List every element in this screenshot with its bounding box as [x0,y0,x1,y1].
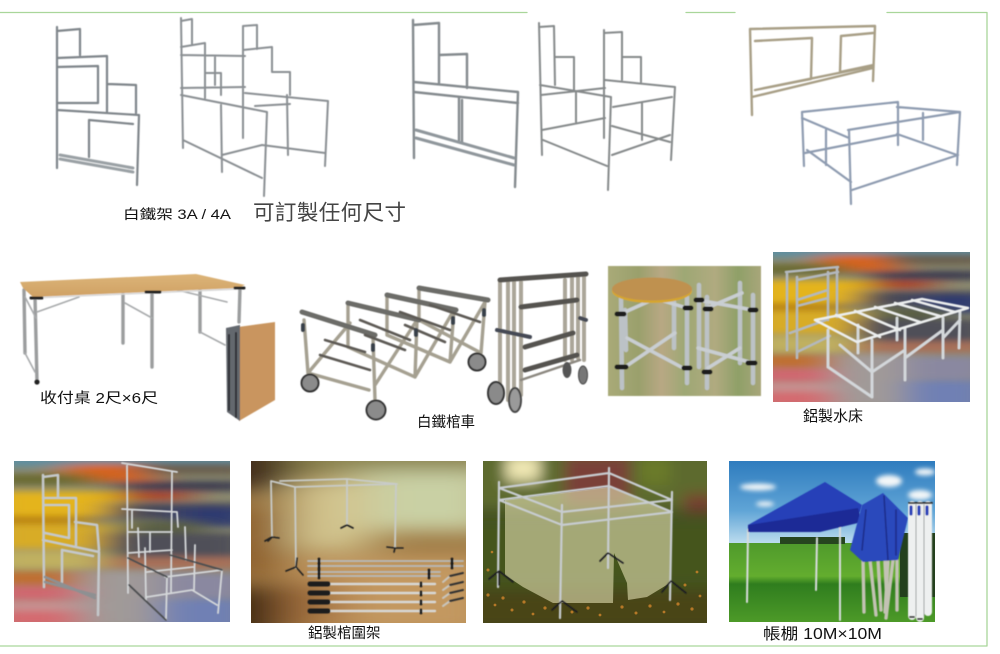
caption: tent size: 帳棚 10M×10M [763,625,882,643]
product: white iron rack small frame [57,27,139,185]
aluminium water bed frame [786,267,968,397]
panel: racks on rainbow background [0,455,264,629]
fallen leaves [486,551,701,616]
caption: white iron coffin cart: 白鐵棺車 [417,414,475,431]
product: beige rack frame [750,26,875,115]
product: folding table [20,274,275,421]
panel: blue canopy tent on lawn [729,461,935,622]
disassembled poles and fittings [308,559,463,613]
assembled blue tent [747,482,862,620]
product: open rack frame [539,23,675,190]
assembled canopy frame [265,479,403,575]
caption: any size can be made: 可訂製任何尺寸 [253,201,406,225]
folded blue tent [850,493,908,618]
product: blue-silver low rack frame [802,102,960,204]
mesh curtain [505,487,672,603]
distant trees [780,537,845,544]
caption: white iron rack: 白鐵架 3A / 4A [123,206,231,222]
product: folded coffin cart [488,274,588,412]
tent frame [489,468,686,618]
caption: folding table: 收付桌 2尺×6尺 [40,390,158,407]
panel: aluminium water bed on rainbow background [746,246,1000,409]
rack frames [43,463,222,620]
product: rack with doors [413,20,518,187]
panel: coffin surround frame on brown background [211,441,511,646]
panel: round table on olive background [608,266,761,396]
panel: mesh tent in garden photo [470,450,720,630]
caption: aluminium water bed: 鋁製水床 [803,408,863,425]
clouds [740,468,935,506]
product: unfolded coffin cart [302,288,488,420]
folded white tent frames [909,503,932,619]
caption: aluminium coffin surround frame: 鋁製棺圍架 [308,625,380,642]
product: white iron rack large frame [181,18,328,196]
